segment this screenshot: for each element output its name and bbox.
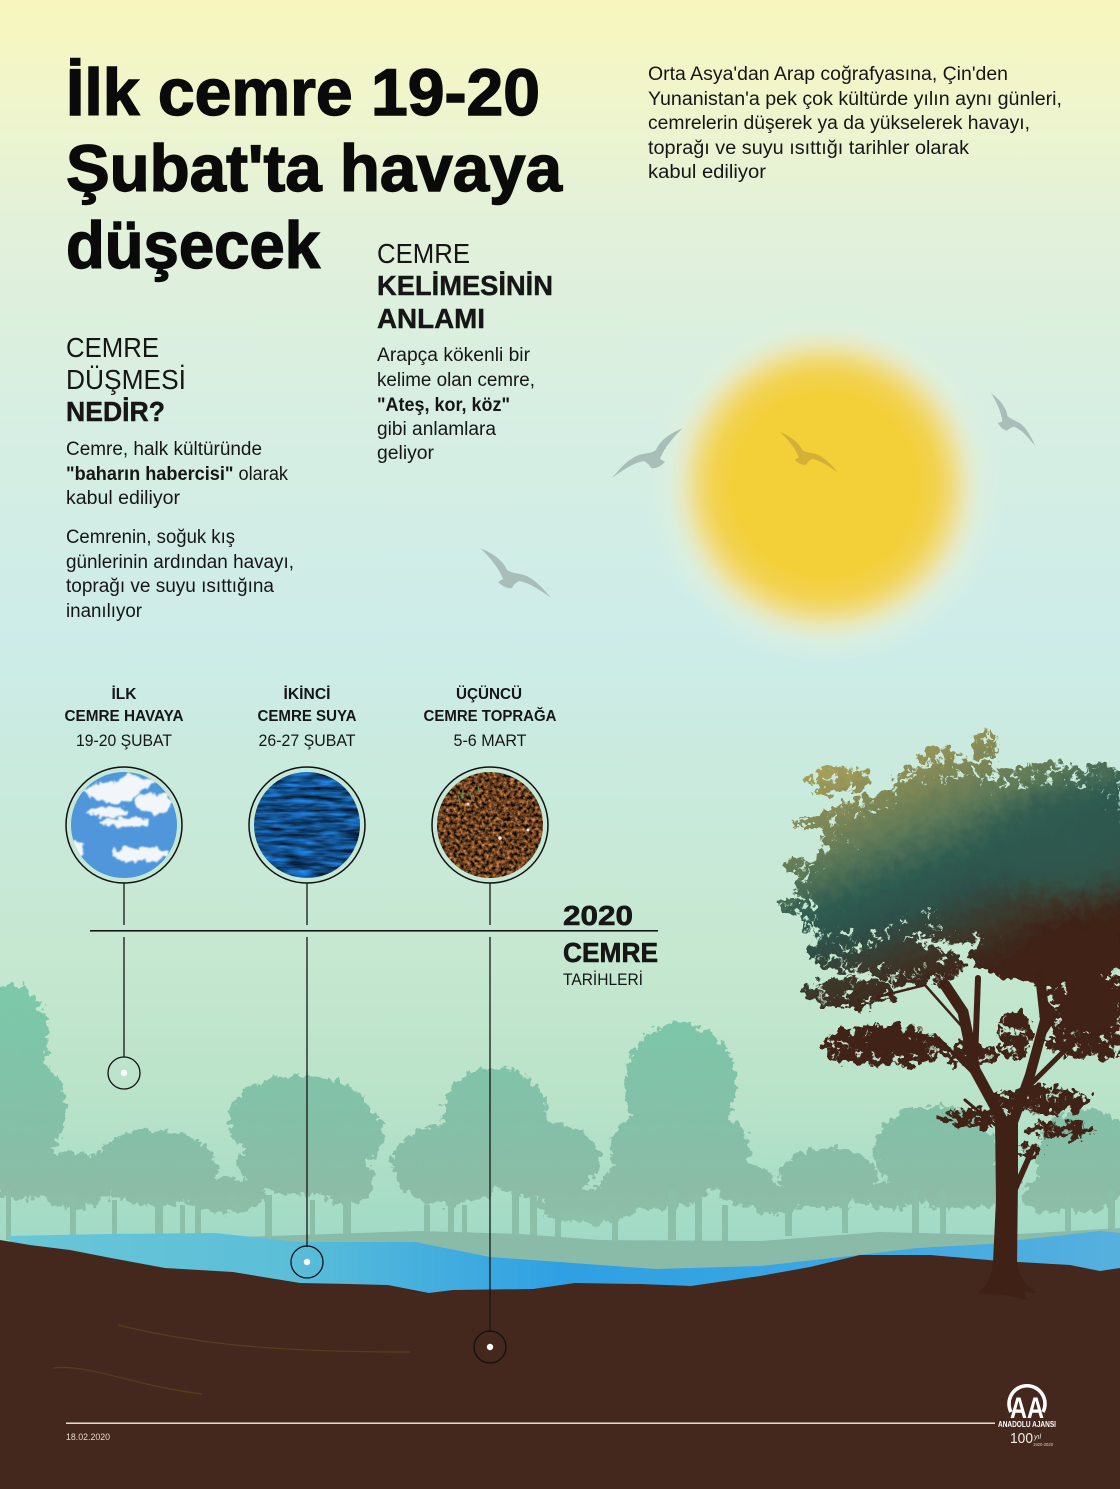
column: ikinci cemre suya xyxy=(249,685,365,1278)
heading: CEMRE xyxy=(66,332,159,363)
soil lines xyxy=(53,1325,410,1394)
label xyxy=(258,685,357,750)
bird: lower left xyxy=(480,548,551,598)
ground xyxy=(0,1240,1120,1489)
body text: günlerinin ardından havayı, xyxy=(66,552,294,573)
timeline heading xyxy=(563,900,658,989)
title: düşecek xyxy=(66,208,320,282)
body text: Cemre, halk kültüründe xyxy=(66,439,262,460)
label: CEMRE TOPRAĞA xyxy=(424,706,557,725)
body text xyxy=(66,439,294,622)
midground strip xyxy=(240,1228,1120,1290)
heading: CEMRE xyxy=(377,238,470,269)
logo: anadolu ajansı: ANADOLU AJANSI xyxy=(998,1419,1056,1429)
body text: Arapça kökenli bir xyxy=(377,345,531,366)
bird: over sun xyxy=(780,432,838,473)
marker xyxy=(474,1331,506,1363)
big tree xyxy=(776,731,1120,1300)
heading xyxy=(66,332,186,427)
label: 19-20 ŞUBAT xyxy=(76,732,172,750)
body text: kelime olan cemre, xyxy=(377,370,535,391)
label: İKİNCİ xyxy=(284,685,330,703)
bird: left of sun xyxy=(612,428,683,478)
logo: anadolu ajansı: 1920-2020 xyxy=(1033,1442,1054,1447)
intro paragraph: cemrelerin düşerek ya da yükselerek havayı, xyxy=(648,113,1030,134)
river xyxy=(10,1231,1120,1300)
heading xyxy=(377,238,553,334)
timeline heading: TARİHLERİ xyxy=(563,970,643,989)
marker xyxy=(291,1246,323,1278)
label: CEMRE HAVAYA xyxy=(64,708,184,725)
tree trunk and branches xyxy=(978,1120,1037,1300)
footer rule xyxy=(66,1422,995,1424)
timeline heading: CEMRE xyxy=(563,937,658,968)
body text: geliyor xyxy=(377,443,435,464)
body text: inanılıyor xyxy=(66,601,143,622)
date: 18.02.2020 xyxy=(66,1432,110,1443)
intro paragraph xyxy=(648,64,1062,183)
panel: cemre kelimesinin anlamı xyxy=(377,238,553,464)
tree foliage: dense core xyxy=(812,780,1120,1054)
intro paragraph: toprağı ve suyu ısıttığı tarihler olarak xyxy=(648,138,970,159)
intro paragraph: Yunanistan'a pek çok kültürde yılın aynı günleri, xyxy=(648,89,1062,110)
logo: anadolu ajansı xyxy=(998,1386,1056,1447)
body text: Cemrenin, soğuk kış xyxy=(66,527,235,548)
body text xyxy=(377,345,535,464)
sun xyxy=(643,303,1007,667)
connector line xyxy=(123,883,125,1057)
body text: kabul ediliyor xyxy=(66,488,181,509)
label: ÜÇÜNCÜ xyxy=(456,684,522,703)
timeline heading: 2020 xyxy=(563,900,633,931)
timeline axis xyxy=(90,930,658,932)
column: üçüncü cemre toprağa xyxy=(424,684,557,1363)
body text: "Ateş, kor, köz" xyxy=(377,395,510,416)
intro paragraph: Orta Asya'dan Arap coğrafyasına, Çin'den xyxy=(648,64,1008,85)
label: 5-6 MART xyxy=(454,732,526,750)
label: İLK xyxy=(112,685,137,703)
connector line xyxy=(489,883,491,1332)
logo: anadolu ajansı: AA xyxy=(1010,1392,1044,1425)
icon: sky photo xyxy=(66,767,182,883)
label xyxy=(64,685,184,750)
title: Şubat'ta havaya xyxy=(66,131,563,205)
marker xyxy=(108,1057,140,1089)
heading: ANLAMI xyxy=(377,303,485,334)
tree foliage: sparse edges xyxy=(776,731,1120,1157)
distant foliage xyxy=(0,985,1120,1223)
birds xyxy=(480,393,1046,598)
column: ilk cemre havaya xyxy=(64,685,184,1089)
icon: water photo xyxy=(249,767,365,883)
body text: gibi anlamlara xyxy=(377,419,496,440)
icon: soil photo xyxy=(432,767,548,883)
tree limbs xyxy=(877,975,1110,1125)
distant trunks xyxy=(6,1190,1115,1241)
connector line xyxy=(306,883,308,1247)
heading: NEDİR? xyxy=(66,396,165,427)
label: CEMRE SUYA xyxy=(258,708,357,725)
panel: cemre düşmesi nedir xyxy=(66,332,294,622)
body text: "baharın habercisi" olarak xyxy=(66,464,288,485)
intro paragraph: kabul ediliyor xyxy=(648,162,767,183)
title xyxy=(66,55,563,282)
body text: toprağı ve suyu ısıttığına xyxy=(66,576,274,597)
logo: anadolu ajansı: yıl xyxy=(1033,1434,1041,1441)
distant tree line xyxy=(0,985,1120,1241)
bird: right of sun xyxy=(981,393,1046,446)
heading: DÜŞMESİ xyxy=(66,364,186,395)
label: 26-27 ŞUBAT xyxy=(258,732,356,750)
title: İlk cemre 19-20 xyxy=(66,55,540,129)
heading: KELİMESİNİN xyxy=(377,270,553,301)
logo: anadolu ajansı: 100 xyxy=(1010,1430,1033,1447)
label xyxy=(424,684,557,750)
